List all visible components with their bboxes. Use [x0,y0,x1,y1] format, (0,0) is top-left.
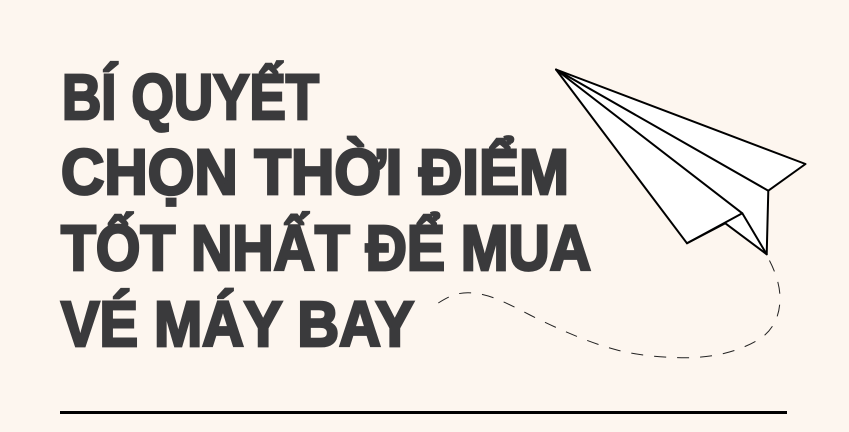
title: VÉ MÁY BAY [61,288,414,360]
title: CHỌN THỜI ĐIỂM [61,135,569,208]
title: BÍ QUYẾT [62,61,319,133]
title [61,61,591,360]
dashed flight path [438,256,780,358]
icon: paper plane [556,70,806,254]
divider line [60,411,787,414]
title: TỐT NHẤT ĐỂ MUA [61,211,591,284]
